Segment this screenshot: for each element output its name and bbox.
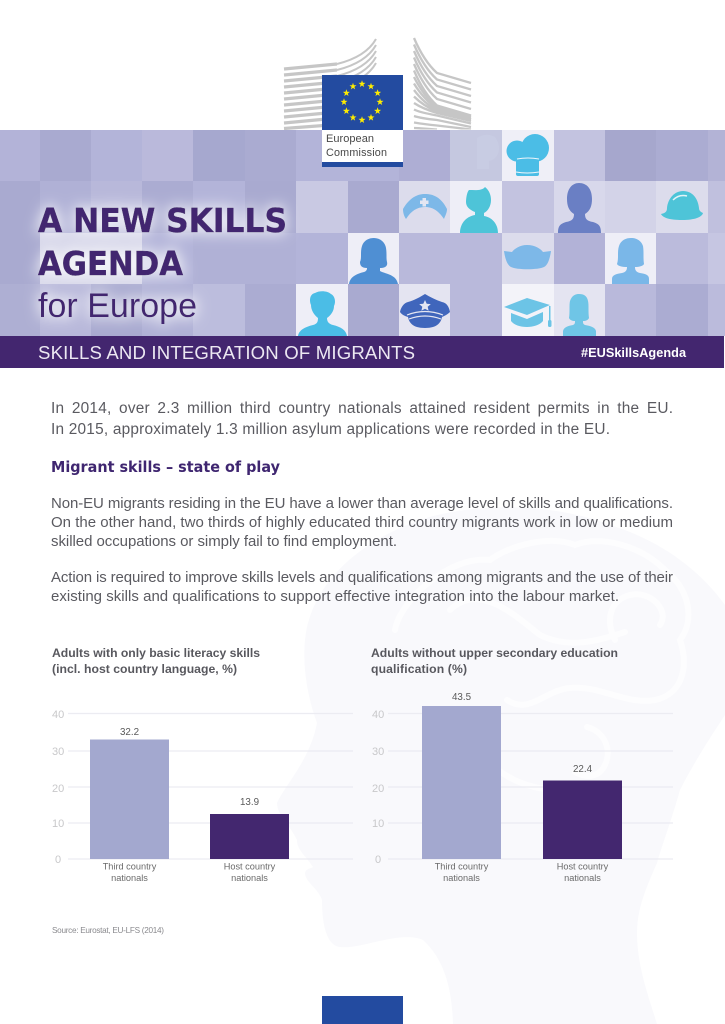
title: A NEW SKILLS	[38, 201, 287, 240]
icon: graduation cap	[504, 298, 552, 327]
hashtag: #EUSkillsAgenda	[581, 346, 687, 360]
bar: host country nationals 13.9	[210, 814, 289, 859]
icon: woman teal	[563, 294, 596, 336]
chart: upper secondary education: 20	[372, 783, 384, 795]
icon: nurse cap	[403, 194, 447, 219]
chart: basic literacy skills: 40	[52, 709, 64, 721]
paragraph: non-EU migrants: Non-EU migrants residing in the EU have a lower than average level of skills and qualifications.	[51, 495, 673, 512]
icon: faint ghost figure	[477, 135, 499, 169]
paragraph: non-EU migrants: On the other hand, two thirds of highly educated third country migrants work in low or medium	[51, 514, 673, 531]
icon: sailor hat	[504, 245, 551, 269]
chart: upper secondary education: nationals	[443, 873, 480, 883]
background watermark: head with brain	[277, 507, 725, 1024]
chart: upper secondary education: 40	[372, 709, 384, 721]
chart: upper secondary education: 43.5	[452, 692, 472, 703]
chart title	[52, 646, 260, 676]
icon: chef hat	[506, 134, 549, 176]
chart: basic literacy skills: 30	[52, 746, 64, 758]
chart: upper secondary education	[371, 646, 673, 883]
chart title: Adults with only basic literacy skills	[52, 646, 260, 660]
title: AGENDA	[38, 244, 183, 283]
bar: third country nationals 32.2	[90, 740, 169, 859]
chart title	[371, 646, 618, 676]
heading: migrant skills: Migrant skills – state of play	[51, 458, 280, 476]
paragraph: action required: Action is required to improve skills levels and qualifications among migrants and the use of their	[51, 569, 673, 586]
paragraph: non-EU migrants: skilled occupations or simply fail to find employment.	[51, 533, 397, 550]
building wing: left	[284, 39, 376, 128]
subtitle band: SKILLS AND INTEGRATION OF MIGRANTS	[38, 342, 415, 363]
intro text	[51, 400, 673, 438]
chart title: (incl. host country language, %)	[52, 662, 237, 676]
footer blue block	[322, 996, 403, 1024]
icon: hard hat	[661, 191, 703, 220]
logo: European Commission	[284, 38, 471, 130]
icon: man purple-blue	[558, 183, 601, 233]
chart: upper secondary education: Third country	[435, 862, 489, 872]
chart title: Adults without upper secondary education	[371, 646, 618, 660]
flag panel of logo: Commission	[326, 147, 387, 159]
icon: woman light blue	[612, 238, 649, 284]
chart: basic literacy skills: Host country	[224, 862, 276, 872]
chart: basic literacy skills: Third country	[103, 862, 157, 872]
paragraph: non-EU migrants	[51, 495, 673, 550]
building wing: right	[414, 38, 471, 130]
title: for Europe	[38, 287, 197, 325]
title	[38, 201, 287, 325]
flag panel of logo	[322, 75, 403, 167]
subtitle band	[0, 336, 724, 368]
chart: basic literacy skills: 0	[55, 854, 61, 866]
chart: basic literacy skills: nationals	[231, 873, 268, 883]
chart: basic literacy skills: 32.2	[120, 727, 139, 738]
chart: upper secondary education: 10	[372, 818, 384, 830]
icon: woman blue	[349, 238, 398, 284]
chart: basic literacy skills: 20	[52, 783, 64, 795]
intro text: In 2014, over 2.3 million third country nationals attained resident permits in the EU.	[51, 400, 673, 417]
paragraph: action required: existing skills and qualifications to support effective integration into the labour market.	[51, 588, 619, 605]
chart: upper secondary education: 0	[375, 854, 381, 866]
flag panel of logo: European	[326, 133, 374, 145]
chart: basic literacy skills: nationals	[111, 873, 148, 883]
chart: basic literacy skills	[52, 646, 353, 883]
chart: basic literacy skills: 10	[52, 818, 64, 830]
chart: upper secondary education: 22.4	[573, 764, 593, 775]
chart title: qualification (%)	[371, 662, 467, 676]
icon: police cap	[400, 294, 450, 328]
bar: third country nationals 43.5	[422, 706, 501, 859]
bar: host country nationals 22.4	[543, 780, 622, 859]
paragraph: action required	[51, 569, 673, 605]
chart: upper secondary education: 30	[372, 746, 384, 758]
chart: upper secondary education: nationals	[564, 873, 601, 883]
chart: basic literacy skills: 13.9	[240, 797, 259, 808]
banner: mosaic of tiles	[0, 130, 725, 336]
icon: man teal	[460, 187, 498, 233]
chart: upper secondary education: Host country	[557, 862, 609, 872]
intro text: In 2015, approximately 1.3 million asylum applications were recorded in the EU.	[51, 421, 610, 438]
source note: Source: Eurostat, EU-LFS (2014)	[52, 926, 164, 935]
icon: man light blue	[298, 291, 347, 336]
